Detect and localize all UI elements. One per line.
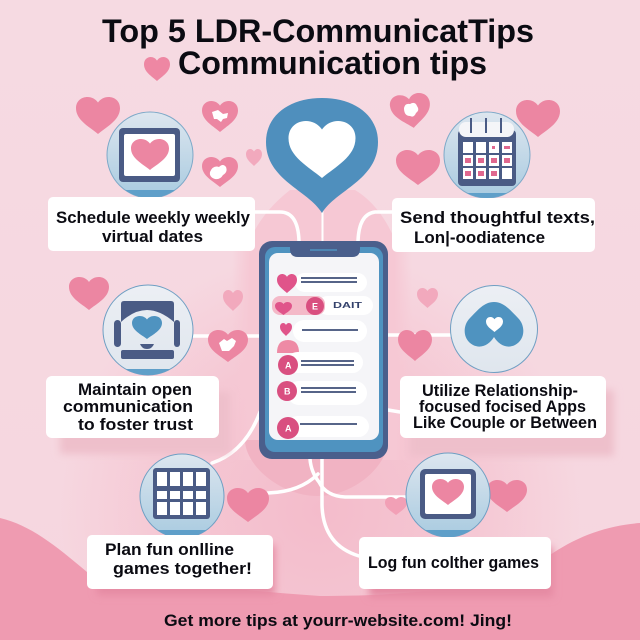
- icon: heart: [227, 488, 269, 522]
- panel: schedule weekly virtual dates: [48, 112, 255, 251]
- footer text: Get more tips at yourr-website.com! Jing!: [164, 611, 512, 630]
- card text: to foster trust: [78, 415, 193, 434]
- card text: virtual dates: [102, 227, 203, 246]
- card text: Plan fun onlline: [105, 540, 234, 559]
- row 1: [277, 273, 367, 293]
- decorative hearts: middle: [69, 277, 438, 362]
- row 2: E: [312, 302, 318, 312]
- card text: [46, 376, 230, 454]
- title: Communication tips: [178, 45, 487, 81]
- icon: calendar: [444, 112, 530, 199]
- icon: device with heart: [103, 285, 193, 377]
- row 5: [277, 381, 367, 405]
- panel: maintain open communication: [46, 285, 230, 454]
- card text: games together!: [113, 559, 252, 578]
- card text: [359, 537, 553, 597]
- card text: focused focised Apps: [419, 397, 586, 416]
- row 2: [272, 296, 373, 315]
- row 2: DAIT: [333, 301, 362, 310]
- panel: relationship apps: [400, 286, 614, 456]
- card text: Log fun colther games: [368, 554, 539, 572]
- decorative hearts: top: [76, 92, 560, 187]
- row 3: [277, 320, 367, 353]
- panel: send thoughtful texts: [392, 112, 595, 252]
- card text: Like Couple or Between: [413, 413, 597, 432]
- row 4: [278, 352, 363, 375]
- icon: small heart: [385, 497, 407, 515]
- row 6: [277, 416, 369, 439]
- card text: Utilize Relationship-: [422, 381, 578, 400]
- card text: [400, 376, 614, 456]
- icon: game grid: [140, 454, 224, 538]
- row 6: A: [285, 424, 292, 434]
- panel: log fun games: [359, 453, 553, 597]
- card text: Maintain open: [78, 380, 192, 399]
- icon: central heart pin: [266, 98, 378, 213]
- connector lines: [193, 212, 451, 556]
- title: [102, 13, 534, 81]
- bottom wave: [0, 518, 640, 640]
- row 5: B: [284, 386, 291, 396]
- title: Top 5 LDR-CommunicatTips: [102, 13, 534, 49]
- panel: plan fun online games: [87, 454, 275, 595]
- icon: heart: [487, 480, 527, 512]
- card text: [87, 535, 275, 595]
- row 4: A: [285, 360, 292, 370]
- icon: blue heart shape: [450, 286, 538, 372]
- panel: phone: [259, 241, 388, 459]
- icon: framed heart: [406, 453, 490, 538]
- card text: [392, 198, 595, 252]
- card text: Lon|-oodiatence: [414, 228, 545, 247]
- icon: title heart: [144, 57, 170, 81]
- card text: Schedule weekly weekly: [56, 208, 251, 227]
- card text: communication: [63, 397, 193, 416]
- card text: [48, 197, 255, 251]
- card text: Send thoughtful texts,: [400, 208, 595, 227]
- icon: screen with heart: [107, 112, 193, 200]
